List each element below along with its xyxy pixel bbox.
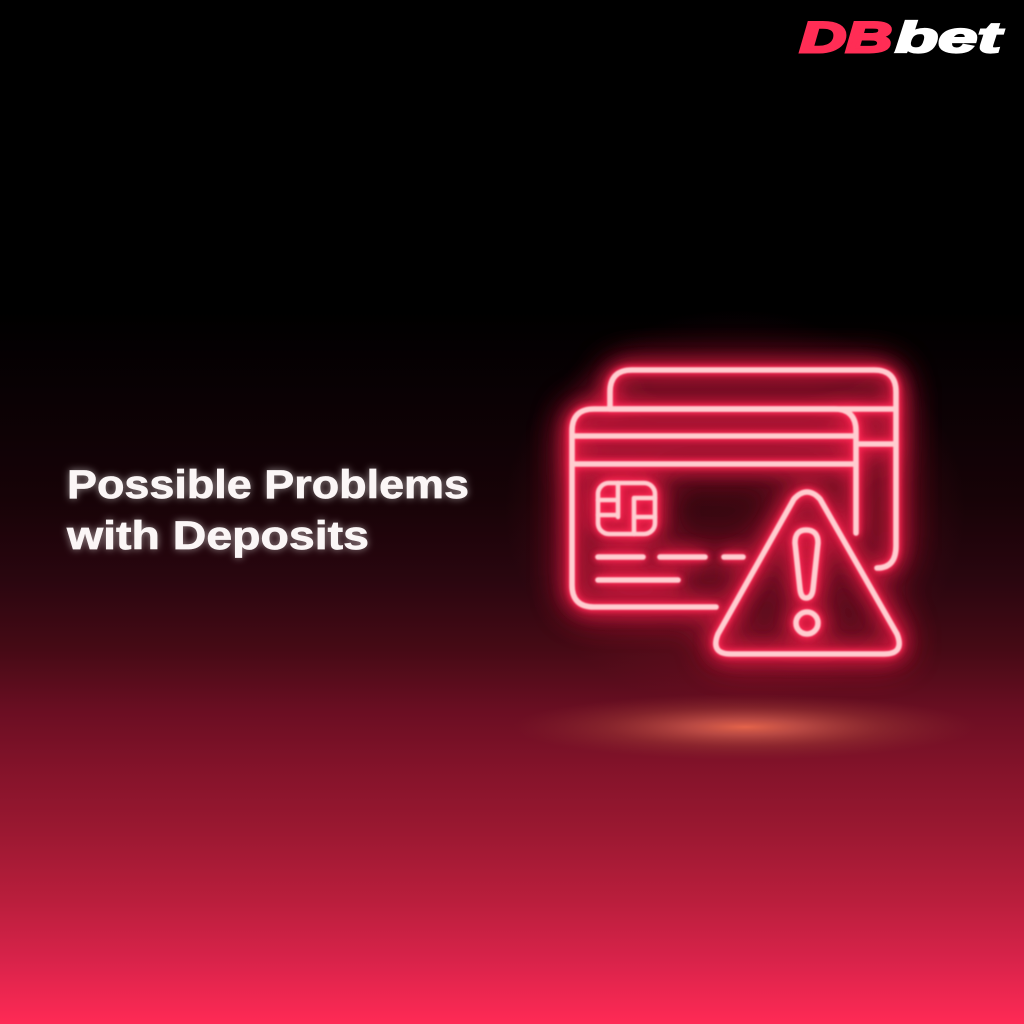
floor light reflection — [513, 694, 977, 760]
title line 2: with Deposits — [66, 514, 369, 558]
card number dashes — [598, 557, 743, 580]
warning triangle — [716, 492, 899, 654]
card chip — [598, 483, 655, 534]
logo text: bet: bet — [895, 14, 1004, 62]
title line 1: Possible Problems — [67, 463, 469, 507]
back card — [610, 370, 896, 568]
logo text: DB: DB — [800, 14, 892, 62]
icon: neon credit cards with warning triangle — [572, 370, 899, 654]
front card — [572, 409, 856, 607]
exclamation mark — [795, 530, 818, 598]
title — [66, 463, 469, 558]
logo: DBbet — [800, 14, 1004, 62]
background halo behind icon — [505, 310, 965, 710]
